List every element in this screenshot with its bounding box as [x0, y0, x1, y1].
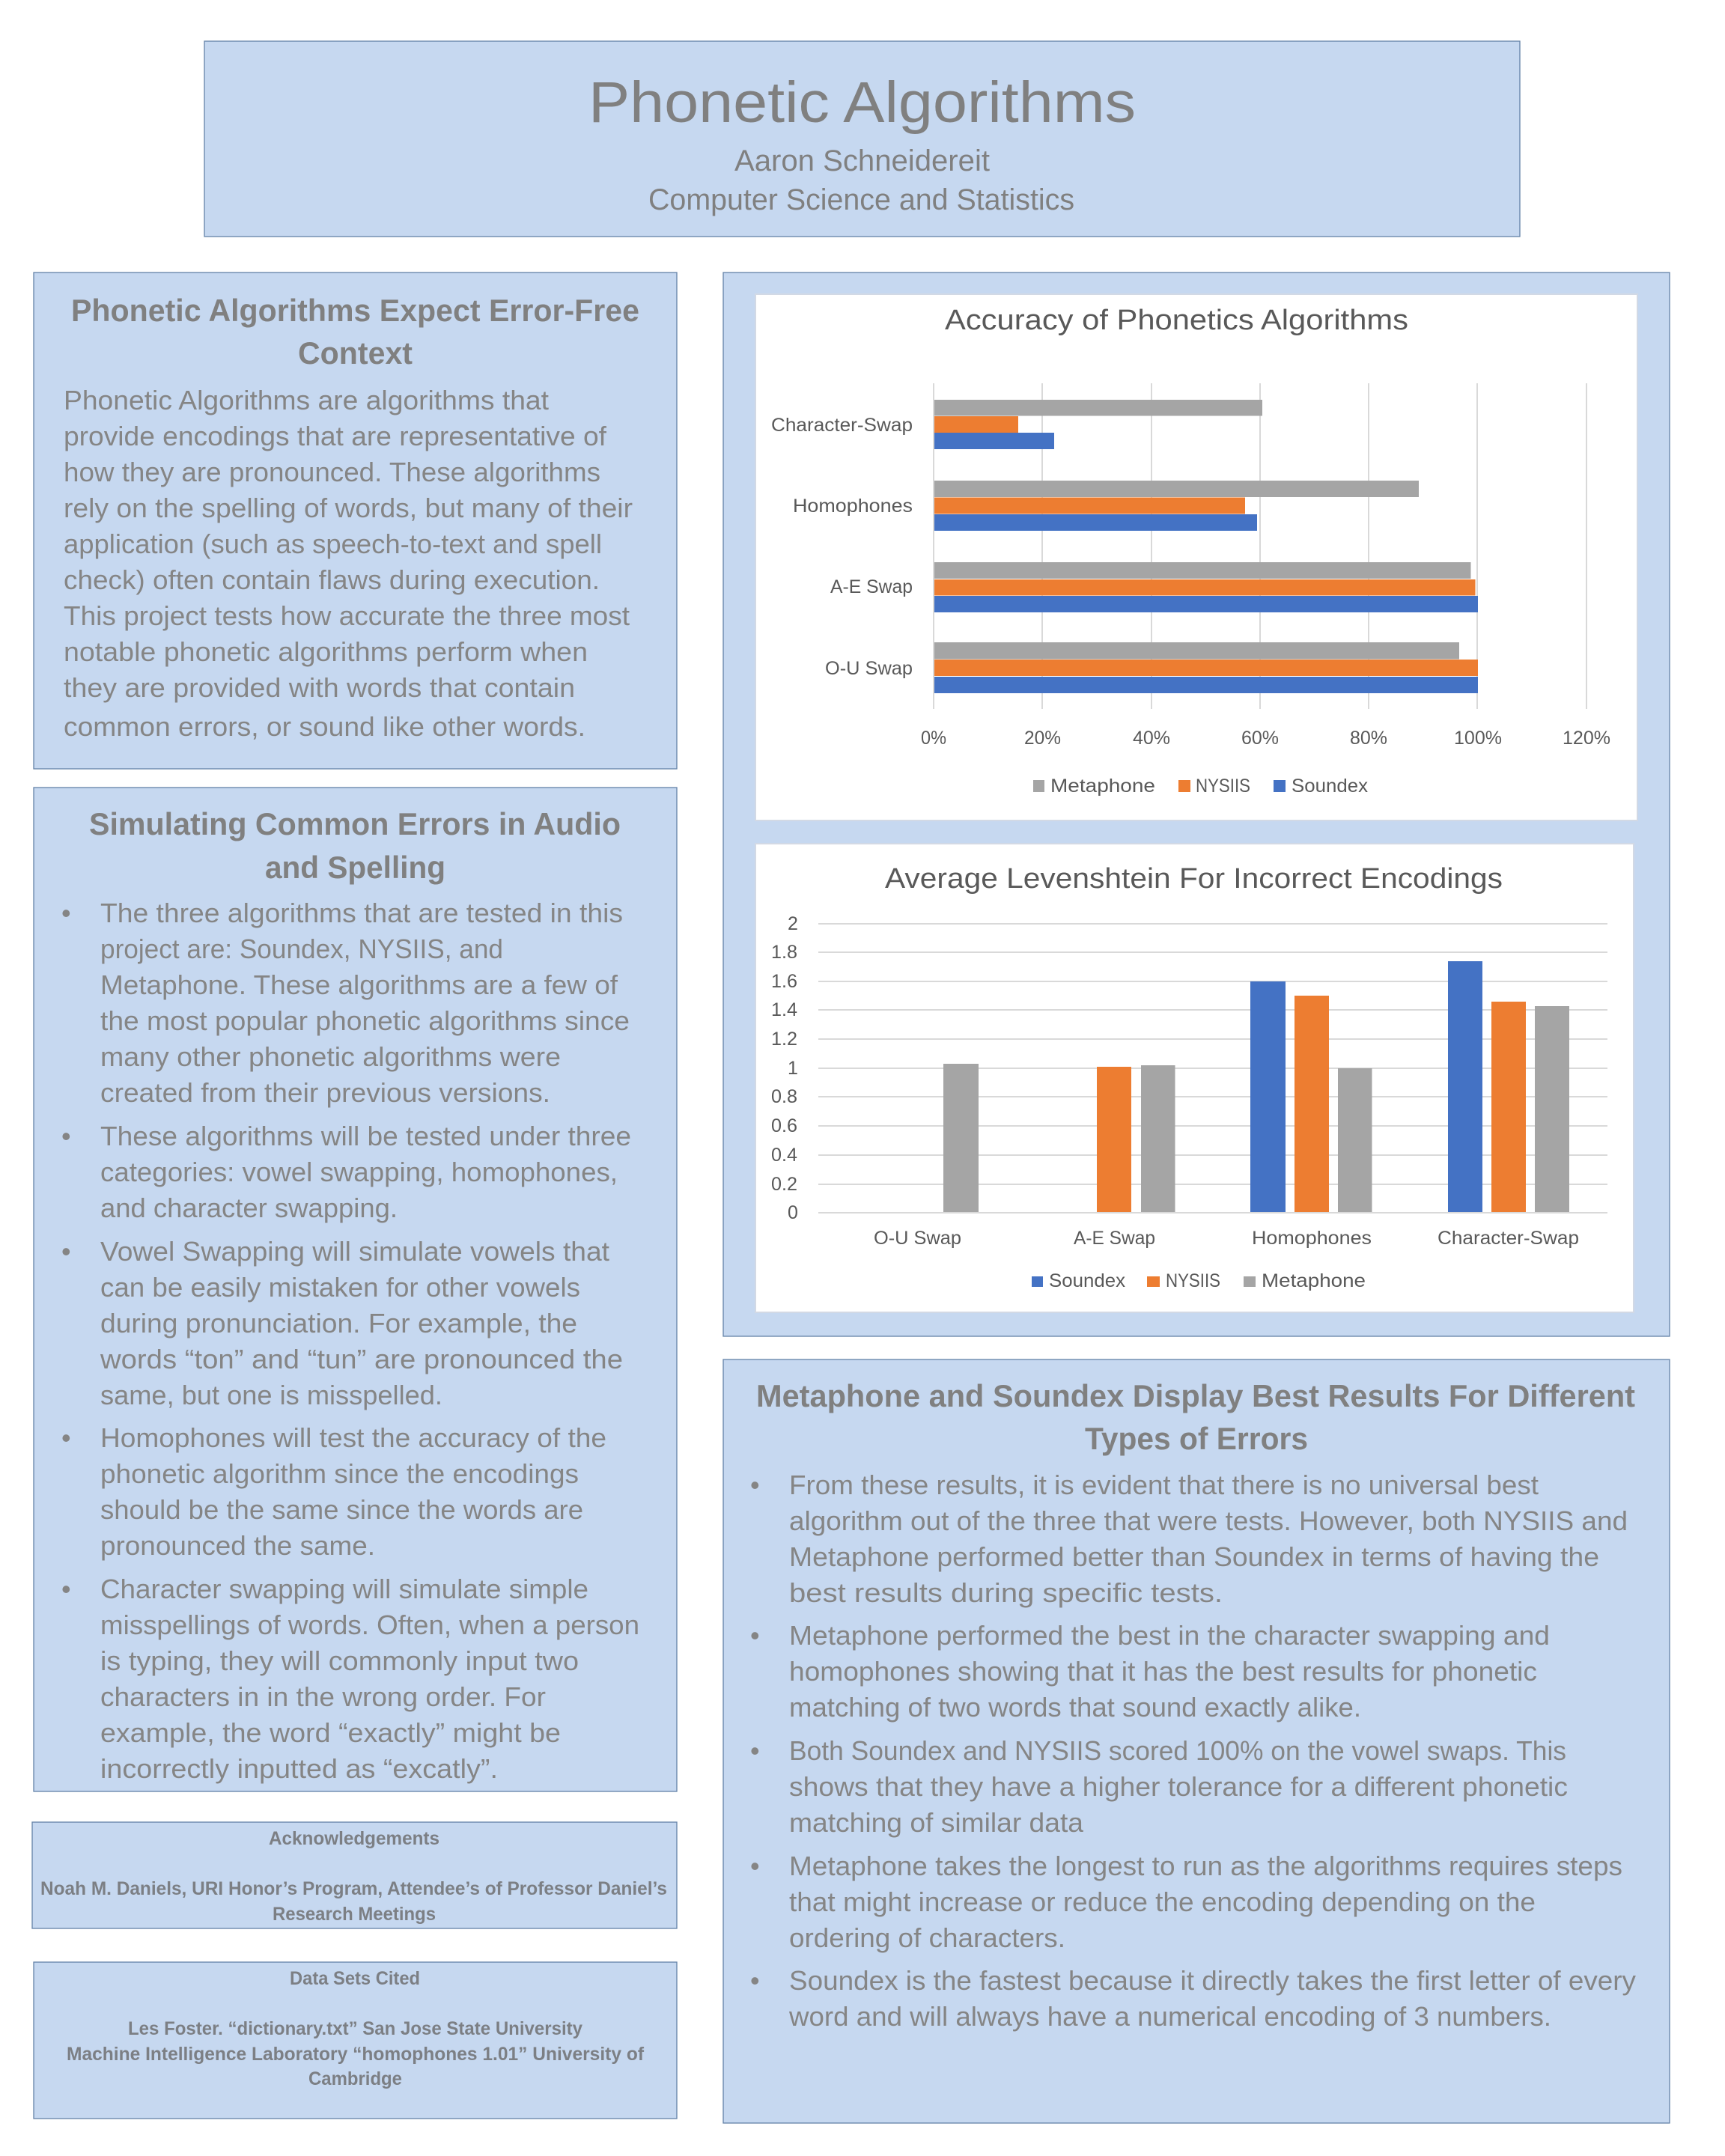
bullet: soundex fastest: [750, 1965, 1636, 2032]
panel: simulating common errors: [34, 788, 677, 1791]
y axis labels: 0.8: [771, 1086, 797, 1107]
bullet: vowel swaps: Both Soundex and NYSIIS scored 100% on the vowel swaps. This: [789, 1735, 1566, 1766]
category labels: [771, 415, 913, 679]
bullet: algorithms tested: many other phonetic algorithms were: [100, 1041, 561, 1072]
bullet: soundex fastest: Soundex is the fastest because it directly takes the first letter of every: [789, 1965, 1636, 1996]
bars: character-swap: [934, 400, 1262, 449]
acknowledgements text: Research Meetings: [273, 1904, 436, 1925]
y axis labels: 2: [788, 913, 798, 934]
bullet: algorithms tested: The three algorithms that are tested in this: [100, 898, 623, 928]
body text: Phonetic Algorithms are algorithms that: [64, 385, 549, 415]
bullet: character swapping: example, the word “exactly” might be: [100, 1717, 561, 1748]
legend: Soundex: [1049, 1270, 1126, 1291]
body text: common errors, or sound like other words.: [64, 711, 585, 742]
bars: o-u swap: [934, 642, 1478, 693]
category labels: A-E Swap: [830, 576, 913, 597]
bullet: algorithms tested: created from their previous versions.: [100, 1077, 550, 1108]
department: Computer Science and Statistics: [648, 183, 1074, 216]
heading: Phonetic Algorithms Expect Error-Free: [71, 293, 639, 328]
bullet: vowel swapping: •: [61, 1236, 71, 1267]
panel: metaphone and soundex results: [723, 1359, 1670, 2123]
bullet: metaphone best: matching of two words that sound exactly alike.: [789, 1692, 1361, 1723]
bullet: vowel swaps: shows that they have a higher tolerance for a different phonetic: [789, 1771, 1568, 1802]
bullet: metaphone longest: [750, 1851, 1622, 1953]
bars: character-swap: [1448, 961, 1569, 1212]
acknowledgements text: [40, 1878, 667, 1925]
bar chart: accuracy of phonetics algorithms: [755, 294, 1637, 820]
legend: Metaphone: [1262, 1270, 1366, 1291]
bars: homophones: [934, 481, 1419, 531]
body text: This project tests how accurate the three most: [64, 600, 630, 631]
bullet: metaphone best: •: [750, 1620, 760, 1651]
bullet: algorithms tested: [61, 898, 630, 1108]
bars: a-e swap: [1097, 1065, 1175, 1212]
axis labels: [921, 728, 1610, 749]
y axis labels: 0.6: [771, 1115, 797, 1136]
body text: notable phonetic algorithms perform when: [64, 636, 588, 667]
bullet: no universal best: best results during specific tests.: [789, 1577, 1223, 1608]
y axis labels: 0.2: [771, 1174, 797, 1195]
bullet: no universal best: algorithm out of the three that were tests. However, both NYSIIS and: [789, 1505, 1628, 1536]
category labels: Homophones: [1252, 1228, 1372, 1249]
bullet: character swapping: Character swapping will simulate simple: [100, 1574, 588, 1604]
legend: NYSIIS: [1166, 1270, 1220, 1291]
heading: Context: [298, 335, 413, 371]
category labels: O-U Swap: [825, 658, 913, 679]
panel: acknowledgements: [32, 1822, 677, 1928]
bullet: metaphone best: [750, 1620, 1550, 1723]
bullet: metaphone best: homophones showing that it has the best results for phonetic: [789, 1656, 1537, 1687]
chart title: Accuracy of Phonetics Algorithms: [945, 305, 1408, 336]
body text: how they are pronounced. These algorithms: [64, 457, 600, 487]
axis labels: 80%: [1350, 728, 1387, 749]
body text: check) often contain flaws during execution.: [64, 564, 600, 595]
axis labels: 0%: [921, 728, 946, 749]
bullet: metaphone longest: •: [750, 1851, 760, 1881]
bullet: homophones: should be the same since the words are: [100, 1494, 583, 1525]
bullet: homophones: [61, 1422, 606, 1561]
panel: phonetic algorithms expect error-free context: [34, 272, 677, 769]
legend: NYSIIS: [1196, 776, 1250, 797]
y axis labels: 0.4: [771, 1145, 797, 1166]
bullet: algorithms tested: Metaphone. These algorithms are a few of: [100, 969, 618, 1000]
author: Aaron Schneidereit: [734, 144, 990, 177]
axis labels: 40%: [1133, 728, 1170, 749]
heading: [756, 1378, 1635, 1456]
bullet: no universal best: •: [750, 1470, 760, 1500]
bullet: categories: These algorithms will be tested under three: [100, 1121, 631, 1151]
heading: [71, 293, 639, 371]
bars: o-u swap: [943, 1064, 979, 1212]
heading: and Spelling: [265, 850, 445, 885]
axis labels: 60%: [1241, 728, 1279, 749]
bullet: character swapping: incorrectly inputted as “excatly”.: [100, 1753, 498, 1784]
bullet: vowel swaps: [750, 1735, 1568, 1838]
citations: Les Foster. “dictionary.txt” San Jose State University: [128, 2018, 582, 2039]
bullet: homophones: •: [61, 1422, 71, 1453]
body text: application (such as speech-to-text and spell: [64, 529, 602, 559]
chart title: Average Levenshtein For Incorrect Encodings: [885, 863, 1503, 895]
bullet: soundex fastest: •: [750, 1965, 760, 1996]
bullet: algorithms tested: the most popular phonetic algorithms since: [100, 1005, 630, 1036]
bullet: vowel swaps: matching of similar data: [789, 1807, 1084, 1838]
bullet: algorithms tested: project are: Soundex, NYSIIS, and: [100, 934, 503, 964]
bullet: metaphone best: Metaphone performed the best in the character swapping and: [789, 1620, 1550, 1651]
legend: Metaphone: [1050, 776, 1155, 797]
column chart: average levenshtein: [755, 844, 1634, 1312]
legend: [1032, 1270, 1366, 1291]
citations: Machine Intelligence Laboratory “homophones 1.01” University of: [67, 2044, 645, 2065]
y axis labels: 1: [788, 1058, 798, 1079]
bullet: metaphone longest: that might increase or reduce the encoding depending on the: [789, 1886, 1536, 1917]
title banner: [204, 41, 1520, 237]
bullet: homophones: phonetic algorithm since the encodings: [100, 1458, 579, 1489]
bullet: homophones: Homophones will test the accuracy of the: [100, 1422, 606, 1453]
bars: homophones: [1250, 981, 1372, 1212]
body text: rely on the spelling of words, but many of their: [64, 493, 633, 523]
bullet: metaphone longest: ordering of characters.: [789, 1922, 1065, 1953]
bullet: no universal best: [750, 1470, 1628, 1608]
heading: Metaphone and Soundex Display Best Results For Different: [756, 1378, 1635, 1413]
body text: [64, 385, 633, 742]
acknowledgements text: Noah M. Daniels, URI Honor’s Program, Attendee’s of Professor Daniel’s: [40, 1878, 667, 1899]
citations: Cambridge: [308, 2068, 402, 2089]
bars: a-e swap: [934, 562, 1478, 612]
heading: Simulating Common Errors in Audio: [89, 806, 621, 841]
y axis labels: 1.2: [771, 1029, 797, 1050]
y axis labels: 0: [788, 1202, 798, 1223]
data sets heading: Data Sets Cited: [290, 1968, 420, 1989]
bullet: vowel swapping: [61, 1236, 623, 1410]
axis labels: 120%: [1563, 728, 1610, 749]
bullet: categories: [61, 1121, 631, 1223]
bullet: categories: •: [61, 1121, 71, 1151]
category labels: O-U Swap: [874, 1228, 961, 1249]
bullet: character swapping: characters in in the wrong order. For: [100, 1681, 546, 1712]
category labels: Character-Swap: [771, 415, 913, 436]
body text: they are provided with words that contain: [64, 672, 575, 703]
panel: data sets cited: [34, 1962, 677, 2119]
legend: Soundex: [1292, 776, 1369, 797]
bullet: algorithms tested: •: [61, 898, 71, 928]
y axis labels: 1.4: [771, 999, 797, 1020]
heading: Types of Errors: [1085, 1421, 1308, 1456]
bullet: character swapping: •: [61, 1574, 71, 1604]
bullet: categories: categories: vowel swapping, homophones,: [100, 1157, 618, 1187]
y axis labels: [771, 913, 798, 1223]
category labels: [874, 1228, 1579, 1249]
bullet: vowel swapping: same, but one is misspelled.: [100, 1380, 442, 1410]
bullet: character swapping: misspellings of words. Often, when a person: [100, 1610, 639, 1640]
bullet: vowel swapping: words “ton” and “tun” are pronounced the: [100, 1344, 623, 1374]
bullet: character swapping: is typing, they will commonly input two: [100, 1645, 579, 1676]
bullet: soundex fastest: word and will always have a numerical encoding of 3 numbers.: [788, 2001, 1551, 2032]
category labels: A-E Swap: [1074, 1228, 1155, 1249]
heading: [89, 806, 621, 885]
bullet: vowel swapping: during pronunciation. For example, the: [100, 1308, 577, 1339]
legend: [1033, 776, 1369, 797]
axis labels: 100%: [1454, 728, 1502, 749]
body text: provide encodings that are representative of: [64, 421, 607, 451]
title: Phonetic Algorithms: [588, 70, 1136, 135]
bullet: vowel swapping: can be easily mistaken for other vowels: [100, 1272, 580, 1303]
citations: [67, 2018, 645, 2089]
bullet: categories: and character swapping.: [100, 1193, 398, 1223]
y axis labels: 1.8: [771, 942, 797, 963]
bullet: metaphone longest: Metaphone takes the longest to run as the algorithms requires steps: [789, 1851, 1622, 1881]
axis labels: 20%: [1024, 728, 1061, 749]
bullet: no universal best: From these results, it is evident that there is no universal best: [789, 1470, 1539, 1500]
bullet: character swapping: [61, 1574, 639, 1784]
acknowledgements heading: Acknowledgements: [269, 1828, 439, 1849]
bullet: vowel swapping: Vowel Swapping will simulate vowels that: [100, 1236, 609, 1267]
bullet: no universal best: Metaphone performed better than Soundex in terms of having the: [789, 1541, 1599, 1572]
y axis labels: 1.6: [771, 971, 797, 992]
category labels: Homophones: [793, 496, 913, 517]
panel: charts: [723, 272, 1670, 1336]
bullet: homophones: pronounced the same.: [100, 1530, 375, 1561]
bullet: vowel swaps: •: [750, 1735, 760, 1766]
category labels: Character-Swap: [1438, 1228, 1579, 1249]
